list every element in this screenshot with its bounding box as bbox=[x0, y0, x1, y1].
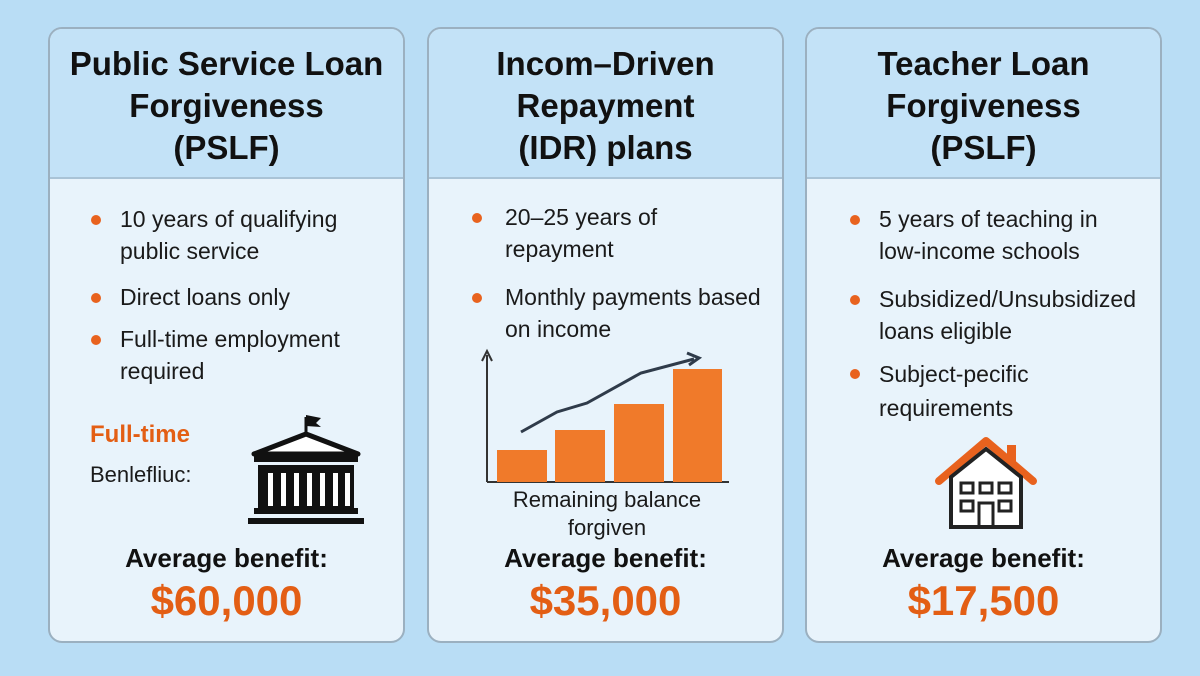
average benefit: Average benefit: bbox=[125, 543, 328, 573]
bullet list: 20–25 years of bbox=[505, 204, 657, 230]
panel: IDR bbox=[427, 27, 784, 643]
heading: IDR: Incom–Driven bbox=[496, 45, 715, 82]
bullet list bbox=[91, 206, 340, 384]
bullet list: Full-time employment bbox=[120, 326, 340, 352]
bullet list: Subject-pecific bbox=[879, 361, 1029, 387]
heading: Teacher: Teacher Loan bbox=[877, 45, 1090, 82]
heading: Teacher bbox=[807, 29, 1160, 179]
text: Full-time benefit bbox=[90, 421, 192, 487]
heading: IDR: Repayment bbox=[517, 87, 694, 124]
heading: PSLF: Forgiveness bbox=[129, 87, 324, 124]
bullet list: repayment bbox=[505, 236, 614, 262]
bullet list: Direct loans only bbox=[120, 284, 290, 310]
bullet list: low-income schools bbox=[879, 238, 1080, 264]
bullet list: Subsidized/Unsubsidized bbox=[879, 286, 1136, 312]
icon: government building bbox=[248, 415, 364, 524]
chart: rising payments bbox=[481, 348, 729, 483]
chart caption bbox=[513, 487, 701, 540]
panel: Teacher bbox=[805, 27, 1162, 643]
amount: $35,000 bbox=[530, 577, 681, 624]
bullet list bbox=[850, 206, 1136, 421]
average benefit: Average benefit: bbox=[504, 543, 707, 573]
amount: $60,000 bbox=[151, 577, 302, 624]
text: Full-time benefit: Full-time bbox=[90, 421, 190, 448]
icon: school house bbox=[935, 437, 1037, 529]
bullet list: on income bbox=[505, 316, 611, 342]
heading: Teacher: Forgiveness bbox=[886, 87, 1081, 124]
heading: IDR bbox=[429, 29, 782, 179]
panel: PSLF bbox=[48, 27, 405, 643]
chart caption: forgiven bbox=[568, 515, 646, 540]
amount: $17,500 bbox=[908, 577, 1059, 624]
bullet list: requirements bbox=[879, 395, 1013, 421]
heading: PSLF bbox=[50, 29, 403, 179]
heading: Teacher: (PSLF) bbox=[930, 129, 1037, 166]
heading: IDR: (IDR) plans bbox=[518, 129, 693, 166]
bullet list: Monthly payments based bbox=[505, 284, 761, 310]
bullet list: public service bbox=[120, 238, 259, 264]
heading: PSLF: (PSLF) bbox=[173, 129, 280, 166]
heading: PSLF: Public Service Loan bbox=[70, 45, 383, 82]
bullet list: required bbox=[120, 358, 204, 384]
bullet list: loans eligible bbox=[879, 318, 1012, 344]
bullet list: 10 years of qualifying bbox=[120, 206, 337, 232]
text: Full-time benefit: Benlefliuc: bbox=[90, 462, 192, 487]
bullet list bbox=[472, 204, 761, 342]
average benefit: Average benefit: bbox=[882, 543, 1085, 573]
chart caption: Remaining balance bbox=[513, 487, 701, 512]
bullet list: 5 years of teaching in bbox=[879, 206, 1098, 232]
